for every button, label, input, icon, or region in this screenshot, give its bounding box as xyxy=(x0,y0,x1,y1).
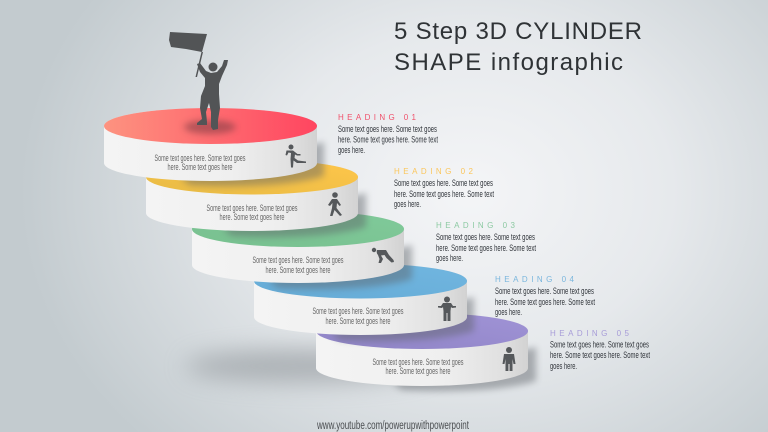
text block: heading 02: HEADING 02 xyxy=(394,167,474,176)
icon: crawling person xyxy=(372,248,394,263)
text block: heading 01: HEADING 01 xyxy=(338,113,417,122)
title xyxy=(394,18,642,76)
text block: heading 05: goes here. xyxy=(550,361,577,372)
text block: heading 03: here. Some text goes here. Some text xyxy=(436,243,536,254)
cylinder 1 caption: here. Some text goes here xyxy=(168,162,232,172)
cylinder step 2 xyxy=(146,160,366,237)
cylinder step 5 xyxy=(316,313,536,391)
icon: standing person xyxy=(502,347,516,371)
cylinder 5 caption: here. Some text goes here xyxy=(386,366,450,376)
cylinder 3 caption xyxy=(252,255,344,275)
text block: heading 02: Some text goes here. Some text goes xyxy=(394,178,493,189)
cylinder 3 caption: here. Some text goes here xyxy=(266,265,330,275)
text block: heading 05: Some text goes here. Some text goes xyxy=(550,340,649,350)
text block: heading 04: goes here. xyxy=(495,307,522,318)
cylinder 4 caption: Some text goes here. Some text goes xyxy=(312,306,404,316)
cylinder 2 caption: here. Some text goes here xyxy=(220,212,284,222)
cylinder 2 caption xyxy=(206,203,298,222)
text block: heading 05: here. Some text goes here. Some text xyxy=(550,350,650,361)
cylinder 1 caption xyxy=(154,153,246,172)
text block: heading 03 xyxy=(436,221,536,264)
text block: heading 02: here. Some text goes here. Some text xyxy=(394,189,494,200)
text block: heading 04: HEADING 04 xyxy=(495,275,575,284)
cylinder 4 caption: here. Some text goes here xyxy=(326,316,390,326)
text block: heading 01: here. Some text goes here. Some text xyxy=(338,134,438,146)
figure with flag xyxy=(169,32,228,130)
text block: heading 04: here. Some text goes here. Some text xyxy=(495,297,595,308)
text block: heading 01 xyxy=(338,113,438,156)
ground shadow xyxy=(185,349,435,383)
text block: heading 03: HEADING 03 xyxy=(436,221,516,230)
cylinder 1 caption: Some text goes here. Some text goes xyxy=(154,153,246,163)
text block: heading 03: Some text goes here. Some text goes xyxy=(436,232,535,243)
cylinder 4 caption xyxy=(312,306,404,326)
text block: heading 04 xyxy=(495,275,595,318)
text block: heading 03: goes here. xyxy=(436,253,463,264)
icon: walking person xyxy=(328,192,342,216)
text block: heading 01: goes here. xyxy=(338,145,365,156)
cylinder 5 caption xyxy=(372,357,464,376)
figure shadow xyxy=(184,120,236,134)
text block: heading 05: HEADING 05 xyxy=(550,329,630,338)
text block: heading 04: Some text goes here. Some text goes xyxy=(495,286,594,297)
cylinder step 4 xyxy=(254,264,474,341)
cylinder 2 caption: Some text goes here. Some text goes xyxy=(206,203,298,213)
text block: heading 02 xyxy=(394,167,494,210)
text block: heading 02: goes here. xyxy=(394,199,421,210)
cylinder step 3 xyxy=(192,211,412,289)
title: 5 Step 3D CYLINDER xyxy=(394,18,642,45)
icon: shrugging person xyxy=(438,296,456,321)
text block: heading 05 xyxy=(550,329,650,372)
icon: running person xyxy=(286,144,306,168)
cylinder 3 caption: Some text goes here. Some text goes xyxy=(252,255,344,265)
text block: heading 01: Some text goes here. Some text goes xyxy=(338,124,437,135)
cylinder step 1 xyxy=(104,32,324,186)
title: SHAPE infographic xyxy=(394,49,623,76)
footer url: www.youtube.com/powerupwithpowerpoint xyxy=(316,420,470,432)
cylinder 5 caption: Some text goes here. Some text goes xyxy=(372,357,464,367)
